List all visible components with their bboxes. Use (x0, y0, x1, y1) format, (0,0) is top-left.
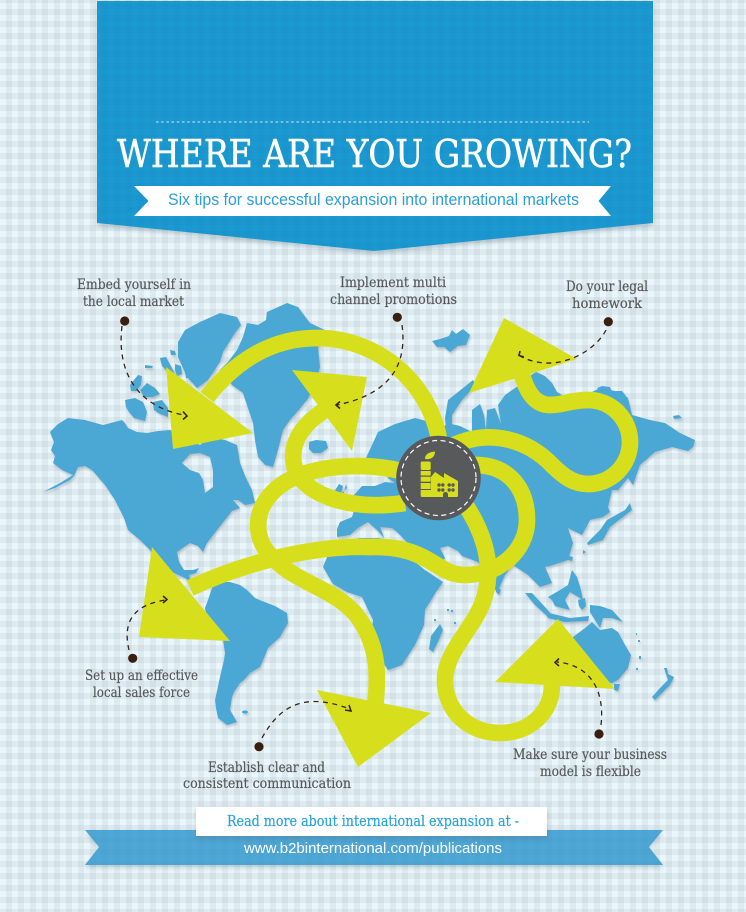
Madagascar (429, 624, 443, 652)
Japan (583, 503, 632, 554)
hub badge with factory icon (396, 436, 481, 520)
icon: factory (421, 452, 458, 497)
footer URL: www.b2binternational.com/publications (243, 840, 502, 857)
Sumatra (525, 593, 552, 616)
Eurasia (337, 372, 695, 593)
read more box (196, 807, 547, 836)
header banner (97, 1, 653, 251)
tip 5: Establish clear and consistent communication: consistent communication (183, 776, 351, 792)
Philippines (568, 556, 573, 561)
Novaya Zemlya (445, 380, 476, 428)
Java (545, 612, 589, 622)
Australia (560, 622, 631, 683)
subtitle ribbon: Six tips for successful expansion into international markets (168, 191, 579, 209)
arrow 4: local sales force (139, 465, 527, 641)
small Indian Ocean islands (434, 609, 641, 670)
tip 1: Embed yourself in the local market: Embed yourself in (77, 277, 191, 293)
arrow 1: embed in local market (166, 338, 440, 449)
arrow 6: flexible business model (445, 500, 615, 733)
Africa (323, 538, 443, 670)
South America (205, 582, 288, 725)
arrow 5: clear communication (258, 466, 431, 767)
Sri Lanka (496, 587, 501, 595)
world map (43, 303, 695, 725)
growth arrows (139, 318, 630, 767)
tip 5: Establish clear and consistent communication: Establish clear and (208, 760, 325, 776)
tip 6: Make sure your business model is flexible: model is flexible (540, 764, 641, 780)
Arctic islands (125, 350, 192, 421)
Papua (590, 605, 623, 628)
tip 3: Do your legal homework: homework (572, 296, 642, 312)
tip 2: Implement multi channel promotions (330, 275, 457, 408)
tip 4: Set up an effective local sales force: local sales force (93, 685, 190, 701)
Greenland (220, 303, 325, 467)
tip 5: Establish clear and consistent communication (183, 702, 351, 792)
Tasmania (614, 684, 620, 691)
read more box: Read more about international expansion at - (227, 814, 519, 830)
title: WHERE ARE YOU GROWING? (117, 132, 632, 177)
tip 2: Implement multi channel promotions: Implement multi (340, 275, 446, 291)
tip 2: Implement multi channel promotions: channel promotions (330, 292, 457, 308)
UK and Ireland (334, 484, 347, 502)
Sulawesi (578, 598, 586, 610)
tip 4: Set up an effective local sales force: Set up an effective (85, 668, 198, 684)
subtitle ribbon (134, 186, 611, 216)
tip 3: Do your legal homework (519, 279, 648, 363)
Falklands (242, 710, 248, 714)
tip 1: Embed yourself in the local market: the local market (83, 294, 184, 310)
Arctic island large (178, 313, 241, 388)
tip 4: Set up an effective local sales force (85, 596, 198, 701)
North America (43, 418, 255, 582)
Arctic Siberia islands (597, 386, 682, 419)
arrow 3: legal homework (452, 318, 630, 484)
tip 6: Make sure your business model is flexible: Make sure your business (513, 747, 667, 763)
tip 6: Make sure your business model is flexible (513, 658, 667, 780)
Iceland (309, 440, 328, 453)
Svalbard (432, 329, 470, 352)
tip 1: Embed yourself in the local market (77, 277, 191, 420)
arrow 2: multi channel promotions (292, 370, 405, 505)
Borneo (548, 570, 583, 610)
footer ribbon (85, 830, 663, 865)
tip 3: Do your legal homework: Do your legal (566, 279, 648, 295)
New Zealand (652, 668, 674, 700)
